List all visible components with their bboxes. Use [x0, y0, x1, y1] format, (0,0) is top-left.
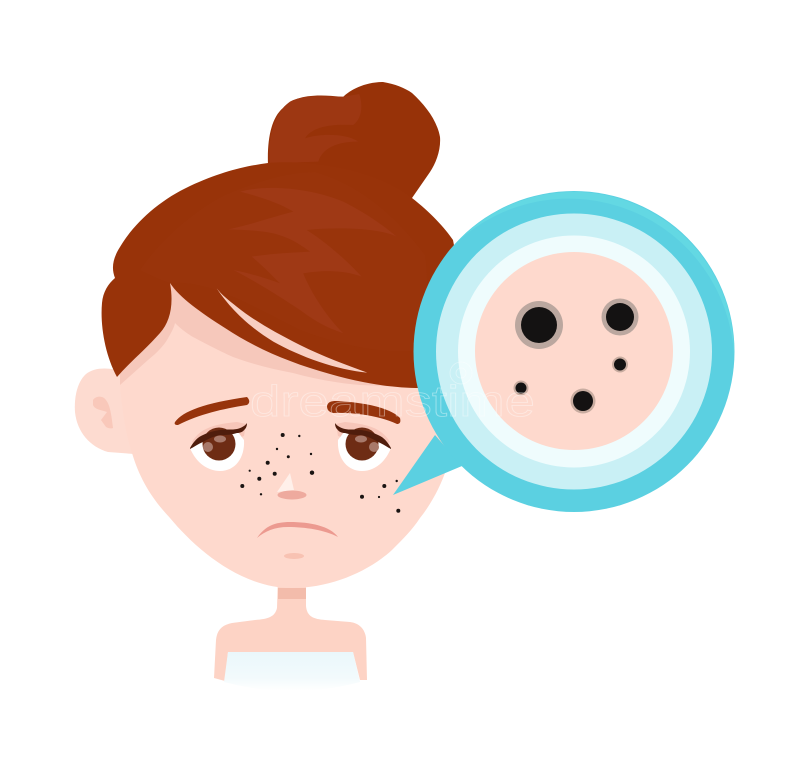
ear	[75, 368, 134, 454]
nose	[277, 473, 306, 500]
blackhead 2	[602, 298, 638, 336]
blackhead 5	[570, 388, 596, 414]
watermark: dreamstime	[250, 377, 535, 426]
left eyebrow	[175, 397, 249, 425]
freckles	[240, 433, 400, 513]
watermark	[250, 362, 535, 426]
face	[120, 283, 445, 588]
bubble inner rings	[436, 214, 712, 490]
mouth	[257, 522, 338, 538]
outer ring highlight	[457, 192, 734, 355]
magnifier bubble	[393, 191, 734, 512]
illustration: girl with acne and magnified skin bubble	[74, 82, 734, 682]
hair gleam	[217, 288, 367, 373]
neck shadow	[278, 588, 306, 599]
blackhead 1	[515, 301, 563, 349]
towel	[224, 652, 360, 691]
bubble outer ring	[414, 191, 734, 512]
hair top sheen	[140, 172, 427, 351]
neck and shoulders	[214, 575, 367, 681]
hairline shadow	[120, 284, 386, 386]
bubble tail	[393, 435, 462, 495]
right eye	[335, 422, 391, 471]
bun highlight	[269, 94, 361, 163]
right eyebrow	[327, 401, 400, 424]
hair bun	[268, 82, 440, 198]
chin mark	[284, 553, 304, 559]
skin close-up	[475, 252, 673, 450]
left eye	[190, 422, 247, 471]
hair streaks	[228, 188, 397, 333]
hair	[102, 162, 470, 388]
blackhead 4	[514, 380, 528, 396]
blackhead 3	[612, 356, 628, 372]
